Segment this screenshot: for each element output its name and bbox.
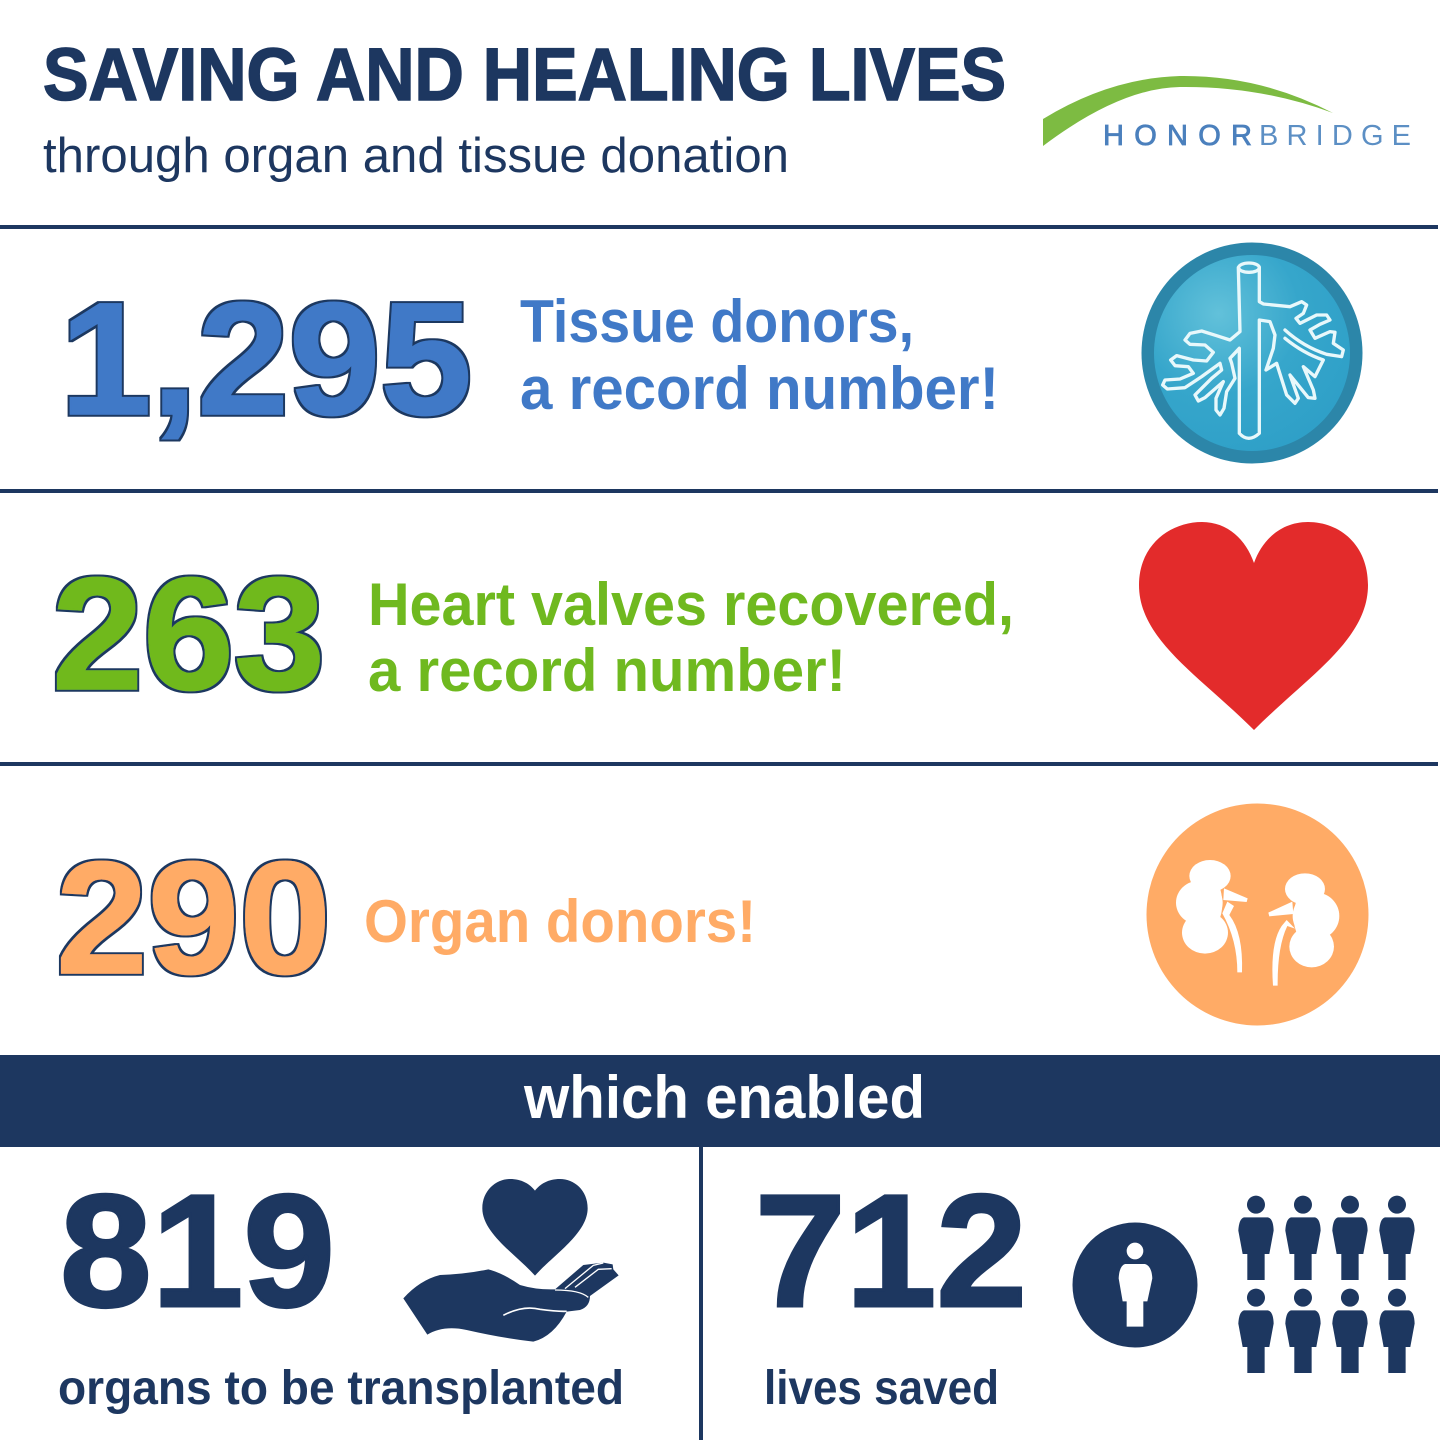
logo: Honorbridge <box>1043 76 1411 152</box>
banner: which enabled: which enabled <box>523 1064 925 1131</box>
stat: 1,295 tissue donors: 1,295 <box>60 269 472 448</box>
stat: 290 organ donors <box>56 828 756 1007</box>
stat: 1,295 tissue donors: a record number! <box>520 355 999 422</box>
icon: kidneys circle <box>1146 804 1368 1026</box>
stat: 712 lives saved: 712 <box>755 1161 1027 1340</box>
stat: 819 organs: organs to be transplanted <box>58 1362 624 1415</box>
divider lines <box>0 225 1438 766</box>
stat: 263 heart valves: Heart valves recovered, <box>368 571 1014 638</box>
logo: Honorbridge: HONOR <box>1103 120 1252 152</box>
stat: 290 organ donors: Organ donors! <box>364 888 756 955</box>
stat: 1,295 tissue donors: Tissue donors, <box>520 288 914 355</box>
subtitle: through organ and tissue donation <box>43 129 789 183</box>
icon: lungs circle <box>1142 242 1362 464</box>
stat: 819 organs: 819 <box>60 1161 335 1340</box>
stat: 290 organ donors: 290 <box>56 828 331 1007</box>
icon: group of people <box>1238 1196 1415 1373</box>
icon: person in circle <box>1072 1222 1198 1348</box>
icon: hand holding heart <box>403 1179 619 1342</box>
title: SAVING AND HEALING LIVES <box>43 33 1006 116</box>
stat: 712 lives saved <box>755 1161 1027 1415</box>
stat: 1,295 tissue donors <box>60 269 999 448</box>
icon: red heart <box>1139 522 1368 730</box>
stat: 263 heart valves: 263 <box>52 544 325 723</box>
stat: 263 heart valves: a record number! <box>368 637 846 704</box>
stat: 819 organs <box>58 1161 624 1415</box>
stat: 712 lives saved: lives saved <box>764 1362 999 1415</box>
banner: which enabled <box>0 1055 1440 1147</box>
stat: 263 heart valves <box>52 544 1014 723</box>
logo: Honorbridge: BRIDGE <box>1259 120 1411 152</box>
vertical divider <box>699 1147 703 1440</box>
